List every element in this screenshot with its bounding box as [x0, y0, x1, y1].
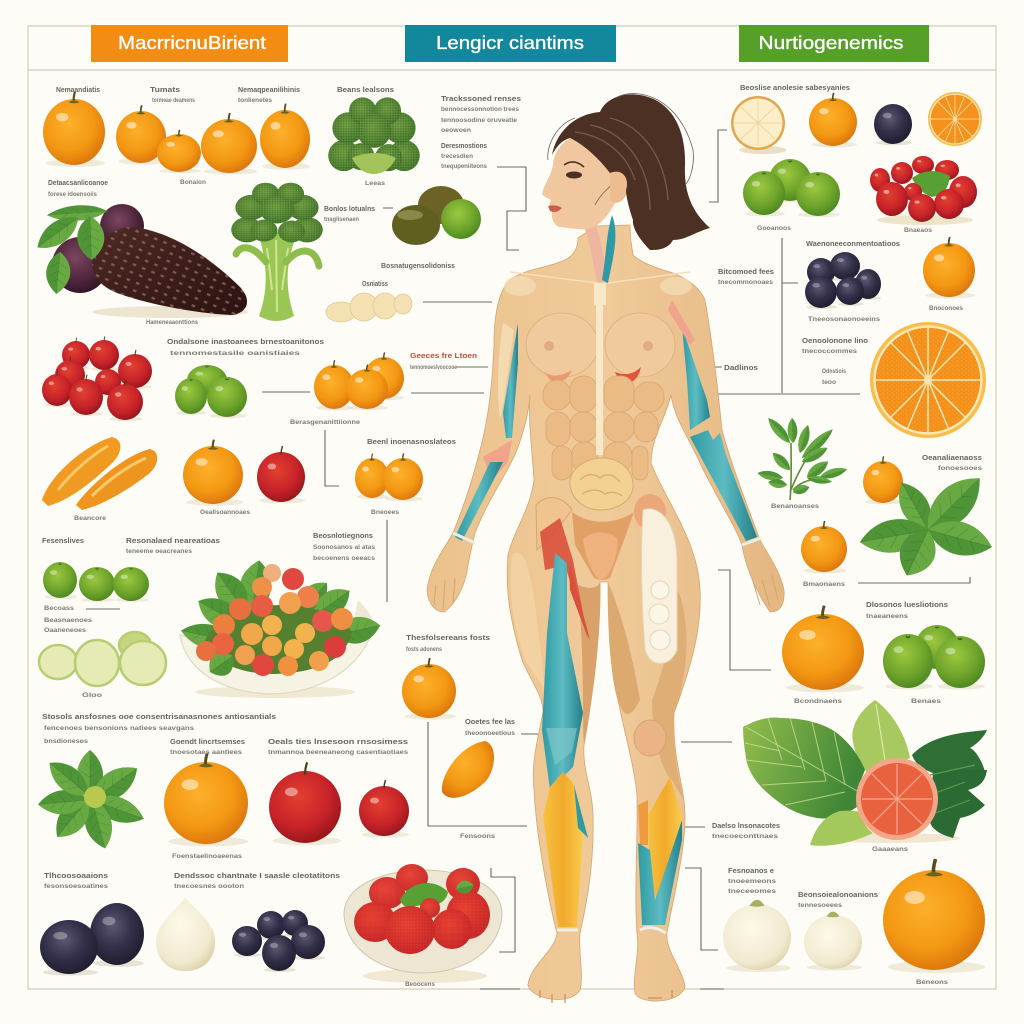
text labels: Beans lealsons — [337, 85, 394, 94]
icon: red apple — [257, 446, 305, 504]
pelvis — [536, 494, 666, 640]
food group: left column top — [31, 92, 481, 322]
icon: cucumber slices — [39, 632, 166, 686]
text labels: fonoesooes — [938, 465, 982, 472]
text labels: Becoass — [44, 605, 74, 612]
text labels: Osniatiss — [362, 279, 388, 288]
text labels: Bonlos lotualns — [324, 204, 375, 213]
text labels: tneceeomes — [728, 888, 776, 895]
text labels: Ooetes fee las — [465, 717, 515, 726]
icon: orange group — [116, 104, 310, 175]
icon: broccoli stalk — [231, 183, 323, 321]
icon: basil leaves — [857, 466, 996, 583]
text labels: Benanoanses — [771, 503, 819, 510]
icon: bowl of mixed fruit — [179, 558, 383, 698]
icon: cream seeds — [326, 293, 412, 322]
hair — [552, 94, 710, 250]
icon: large orange — [164, 753, 248, 846]
text labels: tnoeemeons — [728, 878, 776, 885]
text labels: Berasgenanittiionne — [290, 419, 360, 426]
icon: green fruits — [175, 365, 247, 418]
icon: bowl of strawberries — [344, 864, 502, 983]
icon: cocoa pod with leaves — [31, 203, 248, 318]
text labels: Oeanaliaenaoss — [922, 453, 982, 462]
neck vessels — [578, 190, 615, 283]
text labels: tonlienetes — [238, 97, 272, 104]
icon: small red apple — [359, 780, 409, 838]
text labels: Leeas — [365, 180, 385, 187]
text labels: Bnaeaos — [904, 227, 932, 234]
text labels: forese idoensoiis — [48, 191, 97, 198]
text labels: Bneoees — [371, 509, 399, 516]
banner: lengicr ciantims: Lengicr ciantims — [436, 33, 584, 53]
icon: blueberries — [805, 252, 881, 309]
icon: orange — [402, 658, 456, 720]
icon: orange — [809, 93, 857, 147]
text labels: Beoslise anolesie sabesyanies — [740, 83, 850, 92]
text labels: tnecoeconttnaes — [712, 833, 778, 840]
text labels: Trackssoned renses — [441, 94, 521, 103]
text labels: Hameneaaonttions — [146, 319, 198, 326]
text labels: Deresmostions — [441, 141, 487, 150]
intestine — [570, 458, 633, 510]
text labels: becoenens oeeacs — [313, 555, 375, 562]
text labels: Oeallsoannoaes — [200, 509, 250, 516]
text labels: Dlosonos luesliotions — [866, 600, 948, 609]
text labels: tnaeaneens — [866, 613, 908, 620]
text labels: Beancore — [74, 515, 106, 522]
text labels: Gooanoos — [757, 225, 791, 232]
icon: cream fruit small — [804, 912, 862, 971]
text labels: teoo — [822, 379, 836, 386]
text labels: tnecoccommes — [802, 348, 857, 355]
icon: orange — [923, 237, 975, 299]
text labels: Nemaqpeanilihinis — [238, 85, 300, 94]
text labels: Bcondnaens — [794, 698, 842, 705]
text labels: Benaes — [911, 698, 941, 705]
text labels: Fesenslives — [42, 536, 84, 545]
icon: broccoli head — [328, 97, 420, 174]
text labels: Oeals ties lnsesoon rnsosimess — [268, 737, 408, 746]
banner: nutriogenemics: Nurtiogenemics — [758, 33, 904, 53]
text labels: fesonsoesoatines — [44, 883, 108, 890]
food group: left column bottom — [37, 750, 502, 983]
icon: blueberries — [232, 910, 325, 972]
text labels: trecesdien — [441, 153, 473, 160]
text labels: tennesoeees — [798, 902, 842, 909]
icon: red berries cluster — [42, 336, 152, 421]
text labels: Beonsoiealonoanions — [798, 890, 878, 899]
icon: carrots — [42, 437, 157, 510]
text labels: Dadlinos — [724, 363, 758, 372]
text labels: tnmannoa beeneaneong casentiaotiaes — [268, 749, 408, 756]
icon: small green fruits — [43, 562, 149, 602]
text labels: Ondalsone inastoanees brnestoanitonos — [167, 337, 324, 346]
connector lines — [86, 130, 970, 989]
text labels: tnecoesnes oooton — [174, 883, 244, 890]
head — [542, 94, 710, 250]
text labels: Beneons — [916, 979, 948, 986]
text labels: Bosnatugensolidoniss — [381, 261, 455, 270]
text labels: Soonosanos al atas — [313, 544, 375, 551]
icon: two oranges — [355, 453, 423, 501]
text labels: Odnstiois — [822, 368, 846, 375]
text labels: Gaaaeans — [872, 846, 908, 853]
text labels: Waenoneeconmentoatioos — [806, 239, 900, 248]
leg shading — [511, 553, 687, 800]
icon: green apples — [883, 625, 985, 690]
banner: macronutrient: MacrricnuBirient — [118, 33, 266, 53]
icon: mango — [442, 741, 494, 798]
text labels: Tlhcoosoaaions — [44, 871, 108, 880]
text labels: tennoosodine oruveatie — [441, 117, 517, 124]
text labels: bnsdionesos — [44, 738, 88, 745]
text labels: Beasnaenoes — [44, 617, 92, 624]
text labels: Goendt lincrtsemses — [170, 737, 245, 746]
text labels: Bonaion — [180, 179, 206, 186]
text labels: tnoesotaes aantiees — [170, 749, 242, 756]
text labels: tennomestasile oanistiaies — [170, 350, 301, 357]
chest — [504, 272, 692, 382]
text labels: Beosnlotiegnons — [313, 531, 373, 540]
text labels: Foenstaelinoaeenas — [172, 853, 242, 860]
text labels: Oaaneneoes — [44, 627, 86, 634]
right leg muscles — [634, 509, 682, 933]
header banners — [91, 25, 929, 62]
text labels: oeowoen — [441, 127, 471, 134]
text labels: tormeae deamens — [152, 97, 195, 104]
icon: red tomatoes — [870, 156, 977, 225]
midline — [594, 283, 606, 455]
text labels: Tumats — [150, 85, 180, 94]
text labels: Gloo — [82, 692, 102, 699]
icon: herb sprig — [757, 415, 848, 500]
icon: red apple — [269, 762, 341, 845]
icon: oranges — [314, 352, 404, 410]
text labels: Beoocens — [405, 981, 435, 988]
icon: green apples — [743, 159, 840, 217]
text labels: bennocessonnotion trees — [441, 106, 519, 113]
text labels: Resonalaed neareatioas — [126, 536, 220, 545]
text labels: fencenoes bensonions natiees seavgans — [44, 725, 194, 732]
icon: orange slice — [928, 92, 982, 146]
icon: big leaves with grapefruit — [743, 700, 987, 846]
banner: macronutrient — [91, 25, 288, 62]
left arm muscles — [434, 323, 518, 610]
icon: olives — [392, 186, 481, 245]
text labels: Detaacsanlicoanoe — [48, 178, 108, 187]
figure: human body anatomy — [427, 94, 784, 1003]
icon: leafy greens — [37, 750, 148, 852]
icon: large orange slice — [870, 322, 986, 438]
text labels: fosts adonens — [406, 646, 442, 653]
text labels: tnaglisenaen — [324, 216, 359, 223]
icon: cream fruit — [723, 900, 791, 972]
banner: lengicr ciantims — [405, 25, 616, 62]
banner: nutriogenemics — [739, 25, 929, 62]
icon: orange — [43, 92, 105, 167]
food group: left column middle — [39, 336, 494, 798]
text labels: Nemaandiatis — [56, 85, 100, 94]
icon: lemon slice — [731, 96, 787, 154]
icon: orange — [801, 521, 847, 573]
feet — [540, 990, 672, 1003]
text labels: Bitcomoed fees — [718, 267, 774, 276]
text labels: Thesfolsereans fosts — [406, 633, 490, 642]
text labels: Dendssoc chantnate I saasle cleotatitons — [174, 871, 340, 880]
text labels: Daelso lnsonacotes — [712, 821, 780, 830]
icon: dark plum — [874, 104, 912, 145]
icon: large orange — [782, 606, 864, 692]
icon: orange — [183, 440, 243, 506]
text labels: Fensoons — [460, 833, 495, 840]
text labels: tnequpeniiteons — [441, 163, 487, 170]
text labels: Oenoolonone lino — [802, 336, 868, 345]
text labels: Beenl inoenasnoslateos — [367, 437, 456, 446]
text labels: teneeme oeacreanes — [126, 548, 192, 555]
right arm muscles — [668, 300, 778, 607]
icon: large orange — [883, 859, 985, 973]
text labels: Bnoconoes — [929, 305, 963, 312]
left leg muscles — [542, 553, 590, 930]
abdominal muscles — [543, 376, 664, 480]
icon: orange — [863, 456, 903, 504]
text labels: Geeces fre Ltoen — [410, 351, 477, 360]
text labels: tnecommonoaes — [718, 279, 773, 286]
body silhouette — [427, 225, 784, 1001]
text labels: Stosols ansfosnes ooe consentrisanasnones antiosantials — [42, 712, 276, 721]
food group: right column — [723, 92, 996, 973]
text labels: Bmaonaens — [803, 581, 845, 588]
icon: dark plums — [40, 903, 144, 976]
text labels: tennomoes/voocooe — [410, 364, 457, 371]
text labels: Fesnoanos e — [728, 866, 774, 875]
text labels: theoonoeetious — [465, 730, 515, 737]
text labels: Tneeosonaonoeeins — [808, 316, 880, 323]
icon: onion — [156, 897, 215, 971]
